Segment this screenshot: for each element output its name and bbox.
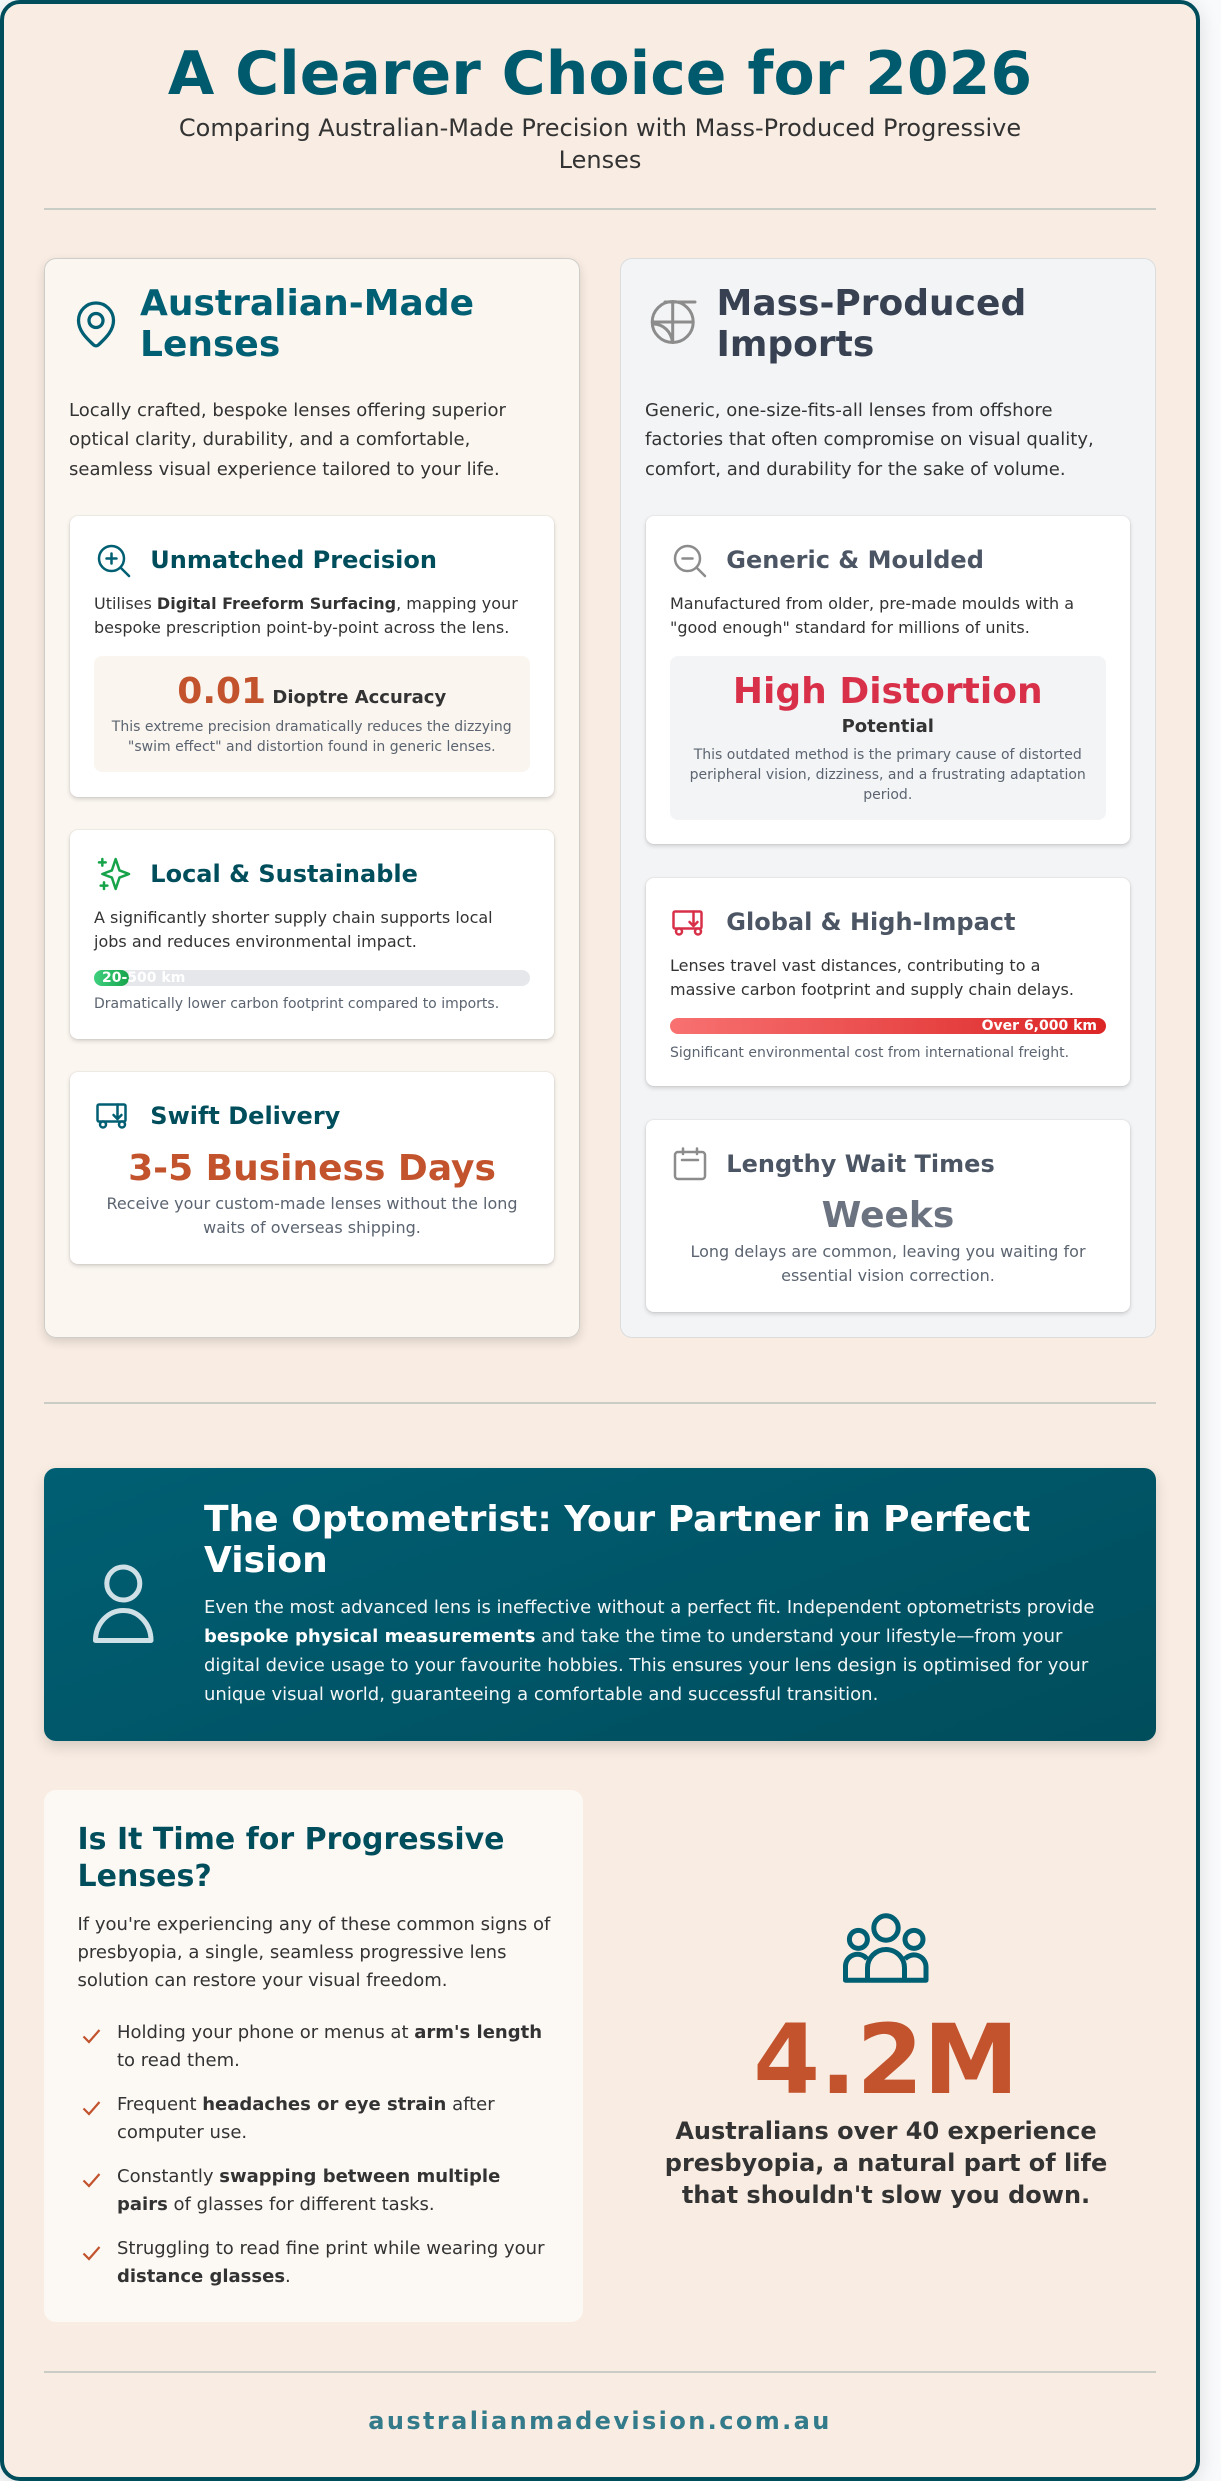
card heading: Local & Sustainable bbox=[150, 860, 418, 888]
banner heading: Vision bbox=[204, 1540, 328, 1581]
card text: jobs and reduces environmental impact. bbox=[94, 932, 417, 950]
icon: magnifier minus bbox=[674, 544, 706, 578]
panel heading: Mass-Produced bbox=[716, 282, 1026, 324]
bar caption: Significant environmental cost from international freight. bbox=[670, 1045, 1069, 1061]
stat note: Receive your custom-made lenses without the long bbox=[106, 1194, 518, 1212]
heading: Lenses? bbox=[78, 1859, 212, 1894]
stat box: high distortion bbox=[670, 656, 1106, 820]
stat note bbox=[690, 1242, 1086, 1284]
panel intro bbox=[645, 400, 1094, 480]
stat note: "swim effect" and distortion found in generic lenses. bbox=[128, 739, 496, 755]
card: unmatched precision bbox=[70, 516, 554, 797]
card: global and high-impact bbox=[646, 878, 1130, 1086]
item text bbox=[117, 2022, 542, 2071]
card heading: Unmatched Precision bbox=[150, 546, 437, 574]
stat value: 3-5 Business Days bbox=[128, 1148, 496, 1188]
icon: check bbox=[82, 2029, 100, 2044]
item text: Frequent headaches or eye strain after bbox=[117, 2094, 495, 2115]
panel heading: Lenses bbox=[140, 324, 280, 365]
item text: to read them. bbox=[117, 2050, 240, 2071]
icon: check bbox=[82, 2101, 100, 2116]
panel intro bbox=[69, 400, 506, 480]
card text bbox=[670, 594, 1074, 636]
icon: person bbox=[93, 1564, 154, 1643]
card text bbox=[94, 908, 493, 950]
subtitle: Lenses bbox=[559, 146, 641, 174]
card: lengthy wait times bbox=[646, 1120, 1130, 1312]
item text: pairs of glasses for different tasks. bbox=[117, 2194, 435, 2215]
icon: map pin bbox=[76, 301, 116, 348]
card: local and sustainable bbox=[70, 830, 554, 1038]
stat note: Long delays are common, leaving you waiting for bbox=[690, 1242, 1086, 1260]
panel heading bbox=[140, 282, 474, 365]
banner heading bbox=[204, 1499, 1030, 1581]
item text bbox=[117, 2238, 544, 2287]
stat note: This extreme precision dramatically reduces the dizzying bbox=[112, 719, 512, 735]
icon: delivery truck bbox=[96, 1103, 127, 1129]
card heading: Swift Delivery bbox=[150, 1102, 340, 1130]
icon: people group bbox=[840, 1910, 932, 1986]
big number: 4.2M bbox=[753, 2004, 1019, 2116]
stat caption: Australians over 40 experience bbox=[675, 2117, 1097, 2145]
stat note: This outdated method is the primary cause of distorted bbox=[694, 747, 1082, 763]
panel intro: factories that often compromise on visual quality, bbox=[645, 429, 1094, 450]
card text: Lenses travel vast distances, contributing to a bbox=[670, 956, 1040, 975]
intro text: solution can restore your visual freedom. bbox=[78, 1970, 447, 1991]
stat value: Weeks bbox=[822, 1194, 954, 1236]
list item 1 bbox=[82, 2022, 542, 2071]
panel heading bbox=[716, 282, 1026, 365]
stat box: dioptre accuracy bbox=[94, 656, 530, 772]
stat note bbox=[690, 747, 1086, 803]
card text: "good enough" standard for millions of units. bbox=[670, 618, 1030, 636]
card heading: Generic & Moulded bbox=[726, 546, 984, 574]
panel: australian-made lenses bbox=[44, 258, 580, 1338]
item text: Struggling to read fine print while wearing your bbox=[117, 2238, 544, 2259]
card text bbox=[94, 594, 518, 636]
stat note bbox=[112, 719, 512, 755]
card text: Utilises Digital Freeform Surfacing, mapping your bbox=[94, 594, 518, 612]
icon: magnifier plus bbox=[98, 544, 130, 578]
stat unit: Potential bbox=[842, 716, 934, 736]
panel heading: Imports bbox=[716, 324, 874, 365]
item text: Constantly swapping between multiple bbox=[117, 2166, 500, 2187]
panel intro: Locally crafted, bespoke lenses offering superior bbox=[69, 400, 506, 421]
subtitle: Comparing Australian-Made Precision with Mass-Produced Progressive bbox=[179, 114, 1021, 142]
item text: computer use. bbox=[117, 2122, 247, 2143]
banner heading: The Optometrist: Your Partner in Perfect bbox=[204, 1499, 1030, 1540]
panel intro: seamless visual experience tailored to your life. bbox=[69, 458, 500, 480]
panel intro: comfort, and durability for the sake of volume. bbox=[645, 458, 1066, 480]
panel intro: Generic, one-size-fits-all lenses from offshore bbox=[645, 400, 1053, 421]
stat: 4.2M australians bbox=[665, 1913, 1107, 2209]
stat note: essential vision correction. bbox=[781, 1266, 995, 1284]
card heading: Global & High-Impact bbox=[726, 908, 1016, 936]
heading: Is It Time for Progressive bbox=[78, 1822, 505, 1857]
heading bbox=[78, 1822, 505, 1894]
intro text bbox=[78, 1914, 551, 1991]
card: generic and moulded bbox=[646, 516, 1130, 844]
banner text: digital device usage to your favourite hobbies. This ensures your lens design is optimised for your bbox=[204, 1655, 1088, 1676]
stat caption bbox=[620, 2115, 1152, 2211]
card heading: Lengthy Wait Times bbox=[726, 1150, 995, 1178]
intro text: presbyopia, a single, seamless progressive lens bbox=[78, 1942, 506, 1963]
panel: mass-produced imports bbox=[620, 258, 1156, 1338]
banner text: unique visual world, guaranteeing a comfortable and successful transition. bbox=[204, 1684, 878, 1705]
subtitle bbox=[179, 114, 1021, 174]
item text: Holding your phone or menus at arm's length bbox=[117, 2022, 542, 2043]
card text: bespoke prescription point-by-point across the lens. bbox=[94, 618, 509, 636]
panel intro: optical clarity, durability, and a comfortable, bbox=[69, 429, 470, 450]
distance bar: 20-500 km bbox=[94, 970, 530, 986]
bar caption: Dramatically lower carbon footprint compared to imports. bbox=[94, 996, 499, 1012]
bar label: 20-500 km bbox=[102, 970, 185, 986]
stat caption: presbyopia, a natural part of life bbox=[665, 2149, 1107, 2177]
icon: calendar bbox=[674, 1147, 706, 1180]
item text: distance glasses. bbox=[117, 2266, 291, 2287]
stat note: period. bbox=[863, 787, 912, 803]
panel: is it time for progressive lenses bbox=[44, 1790, 583, 2322]
title: A Clearer Choice for 2026 bbox=[168, 39, 1032, 109]
item text bbox=[117, 2166, 500, 2215]
stat note: peripheral vision, dizziness, and a frustrating adaptation bbox=[690, 767, 1086, 783]
banner text bbox=[204, 1596, 1094, 1705]
banner text: bespoke physical measurements and take the time to understand your lifestyle—from your bbox=[204, 1626, 1062, 1647]
card text: massive carbon footprint and supply chain delays. bbox=[670, 980, 1074, 999]
list item 3 bbox=[82, 2166, 500, 2215]
card text: A significantly shorter supply chain supports local bbox=[94, 908, 493, 926]
stat value: 0.01 Dioptre Accuracy bbox=[177, 671, 446, 712]
intro text: If you're experiencing any of these common signs of bbox=[78, 1914, 550, 1935]
list item 2 bbox=[82, 2094, 495, 2143]
icon: check bbox=[82, 2173, 100, 2188]
banner text: Even the most advanced lens is ineffective without a perfect fit. Independent optometrists provide bbox=[204, 1596, 1094, 1618]
stat note: waits of overseas shipping. bbox=[203, 1218, 421, 1236]
distance bar: over 6,000 km bbox=[670, 1018, 1106, 1034]
card text bbox=[670, 956, 1074, 999]
bar fill bbox=[94, 970, 128, 986]
card text: Manufactured from older, pre-made moulds with a bbox=[670, 594, 1074, 612]
banner: the optometrist bbox=[44, 1468, 1156, 1741]
panel heading: Australian-Made bbox=[140, 282, 474, 324]
card: swift delivery bbox=[70, 1072, 554, 1264]
icon: sparkles bbox=[98, 858, 130, 890]
icon: check bbox=[82, 2246, 100, 2261]
footer url: australianmadevision.com.au bbox=[368, 2407, 832, 2435]
bar label: Over 6,000 km bbox=[982, 1018, 1097, 1034]
icon: freight truck bbox=[672, 910, 703, 936]
stat note bbox=[106, 1194, 518, 1236]
stat value: High Distortion bbox=[733, 671, 1043, 712]
item text bbox=[117, 2094, 495, 2143]
stat caption: that shouldn't slow you down. bbox=[682, 2181, 1090, 2209]
list item 4 bbox=[82, 2238, 544, 2287]
icon: globe bbox=[650, 300, 696, 344]
